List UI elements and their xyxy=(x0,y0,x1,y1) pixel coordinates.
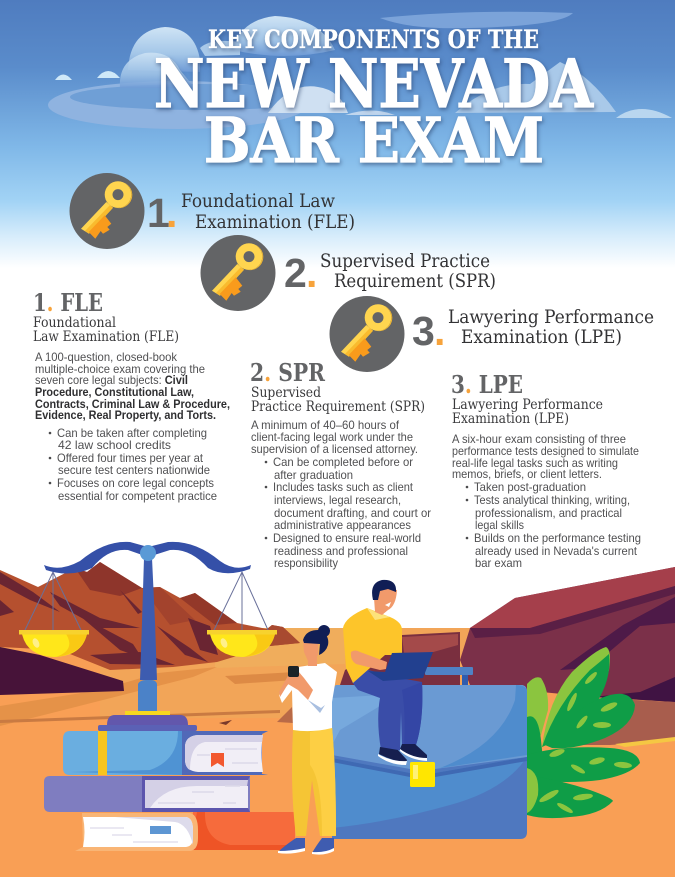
component 2 label: 2 xyxy=(284,250,307,296)
subheading: LPE: Lawyering Performance xyxy=(452,397,603,413)
panel: SPR xyxy=(250,358,431,570)
heading: 1. FLE: 1. FLE xyxy=(33,288,103,317)
middle book xyxy=(44,776,250,812)
list: LPE bullets xyxy=(466,480,641,570)
list: SPR bullets: administrative appearances xyxy=(274,518,411,532)
component 2 label: Requirement (SPR) xyxy=(334,270,496,292)
text: SPR description: supervision of a licensed attorney. xyxy=(251,442,418,456)
text: FLE description: seven core legal subjects: Civil xyxy=(35,373,188,387)
back leaves xyxy=(527,677,548,745)
text: SPR description xyxy=(251,418,418,456)
icon: key 1 xyxy=(70,173,144,249)
component 2 label: . xyxy=(306,250,317,296)
component 3 label: 3 xyxy=(412,308,435,354)
component 3 label: Lawyering Performance xyxy=(448,306,654,328)
list: SPR bullets: readiness and professional xyxy=(274,544,408,558)
mountains left xyxy=(0,562,300,695)
list: SPR bullets xyxy=(265,455,431,570)
component 2 label: Supervised Practice xyxy=(320,250,490,272)
leaf 2 xyxy=(545,694,635,748)
list: SPR bullets: after graduation xyxy=(274,468,353,482)
list: LPE bullets: legal skills xyxy=(475,518,524,532)
text: FLE description: A 100-question, closed-book xyxy=(35,350,178,364)
plant xyxy=(527,647,640,818)
title xyxy=(154,25,594,177)
subheading: SPR xyxy=(251,385,425,415)
panel: LPE xyxy=(451,370,641,570)
component 3 label: Examination (LPE) xyxy=(461,326,622,348)
list: SPR bullets: Includes tasks such as client xyxy=(273,480,414,494)
woman shoes xyxy=(278,838,334,855)
text: SPR description: client-facing legal work under the xyxy=(251,430,413,444)
man shirt xyxy=(343,608,402,683)
subheading: FLE xyxy=(33,315,179,345)
text: SPR description: A minimum of 40–60 hours of xyxy=(251,418,400,432)
text: FLE description: Contracts, Criminal Law & Procedure, xyxy=(35,397,230,411)
component 3 label: . xyxy=(434,308,445,354)
text: LPE description: performance tests designed to simulate xyxy=(452,444,639,458)
list: FLE bullets: Can be taken after completing xyxy=(57,426,207,440)
leaf 3 xyxy=(527,747,640,782)
sky background xyxy=(0,0,675,268)
man with laptop xyxy=(343,580,473,765)
component 1 label: 1 xyxy=(147,190,170,236)
scale base column xyxy=(138,680,157,711)
list: SPR bullets: document drafting, and court or xyxy=(274,506,431,520)
panel: FLE xyxy=(33,288,230,503)
subheading: FLE: Law Examination (FLE) xyxy=(33,329,179,345)
heading: 2. SPR: 2. SPR xyxy=(250,358,326,387)
leaf 4 xyxy=(527,775,613,818)
text: LPE description: real-life legal tasks such as writing xyxy=(452,456,618,470)
component 2 label xyxy=(284,250,496,296)
briefcase xyxy=(332,685,527,839)
icon: key 3 xyxy=(330,296,404,372)
books stack xyxy=(44,731,295,851)
list: FLE bullets: Offered four times per year at xyxy=(57,451,204,465)
top book xyxy=(63,731,268,775)
subheading: SPR: Practice Requirement (SPR) xyxy=(251,399,425,415)
clouds xyxy=(48,12,672,129)
scale strings xyxy=(25,572,268,630)
subheading: SPR: Supervised xyxy=(251,385,321,401)
woman with phone xyxy=(278,625,337,855)
list: FLE bullets xyxy=(49,426,217,503)
woman pants xyxy=(292,727,336,836)
list: SPR bullets: responsibility xyxy=(274,556,338,570)
title: NEW NEVADA xyxy=(154,45,594,123)
title: KEY COMPONENTS OF THE xyxy=(208,25,539,54)
text: LPE description: A six-hour exam consisting of three xyxy=(452,432,626,446)
list: FLE bullets: essential for competent practice xyxy=(58,489,217,503)
list: FLE bullets: 42 law school credits xyxy=(58,438,171,452)
list: SPR bullets: Can be completed before or xyxy=(273,455,413,469)
list: LPE bullets: professionalism, and practical xyxy=(475,506,622,520)
left pan xyxy=(19,630,89,657)
leaf 1 xyxy=(542,647,610,747)
subheading: FLE: Foundational xyxy=(33,315,116,331)
component 1 label: Foundational Law xyxy=(181,190,336,212)
component 1 label: Examination (FLE) xyxy=(195,211,355,233)
text: LPE description: memos, briefs, or client letters. xyxy=(452,467,602,481)
list: FLE bullets: Focuses on core legal concepts xyxy=(57,476,214,490)
woman head xyxy=(303,625,330,666)
scale beam xyxy=(44,542,251,574)
scale column xyxy=(140,558,157,680)
list: LPE bullets: bar exam xyxy=(475,556,522,570)
woman sleeve shadow xyxy=(308,700,325,713)
list: SPR bullets: Designed to ensure real-world xyxy=(273,531,421,545)
leaf spots xyxy=(527,671,632,815)
subheading: LPE: Examination (LPE) xyxy=(452,411,569,427)
text: FLE description xyxy=(35,350,230,422)
component 1 label: . xyxy=(166,190,177,236)
text: FLE description: multiple-choice exam covering the xyxy=(35,362,205,376)
icon: scales of justice xyxy=(19,542,277,731)
bottom book xyxy=(75,812,295,851)
list: LPE bullets: Builds on the performance testing xyxy=(474,531,641,545)
desert ground xyxy=(0,628,675,877)
text: LPE description xyxy=(452,432,639,481)
phone xyxy=(288,666,299,677)
icon: key 2 xyxy=(200,235,276,311)
list: SPR bullets: interviews, legal research, xyxy=(274,493,401,507)
component 1 label xyxy=(147,190,355,236)
list: LPE bullets: already used in Nevada's current xyxy=(475,544,638,558)
man head xyxy=(372,580,397,615)
woman arm xyxy=(279,671,313,700)
text: FLE description: Evidence, Real Property, and Torts. xyxy=(35,408,216,422)
text: FLE description: Procedure, Constitutional Law, xyxy=(35,385,194,399)
man collar xyxy=(367,608,390,620)
man legs xyxy=(352,670,422,750)
list: LPE bullets: Tests analytical thinking, writing, xyxy=(474,493,630,507)
laptop xyxy=(368,652,433,681)
subheading: LPE xyxy=(452,397,603,427)
scale pivot xyxy=(140,545,156,561)
man arm xyxy=(351,650,387,670)
mountains right xyxy=(340,567,675,747)
component 3 label xyxy=(412,306,654,354)
scale base xyxy=(98,711,197,731)
title: BAR EXAM xyxy=(204,104,544,177)
right pan xyxy=(207,630,277,657)
bench xyxy=(425,667,473,685)
man shoes xyxy=(378,744,427,765)
list: LPE bullets: Taken post-graduation xyxy=(474,480,586,494)
woman shirt xyxy=(279,663,337,731)
heading: 3. LPE: 3. LPE xyxy=(451,370,523,399)
list: FLE bullets: secure test centers nationwide xyxy=(58,463,210,477)
